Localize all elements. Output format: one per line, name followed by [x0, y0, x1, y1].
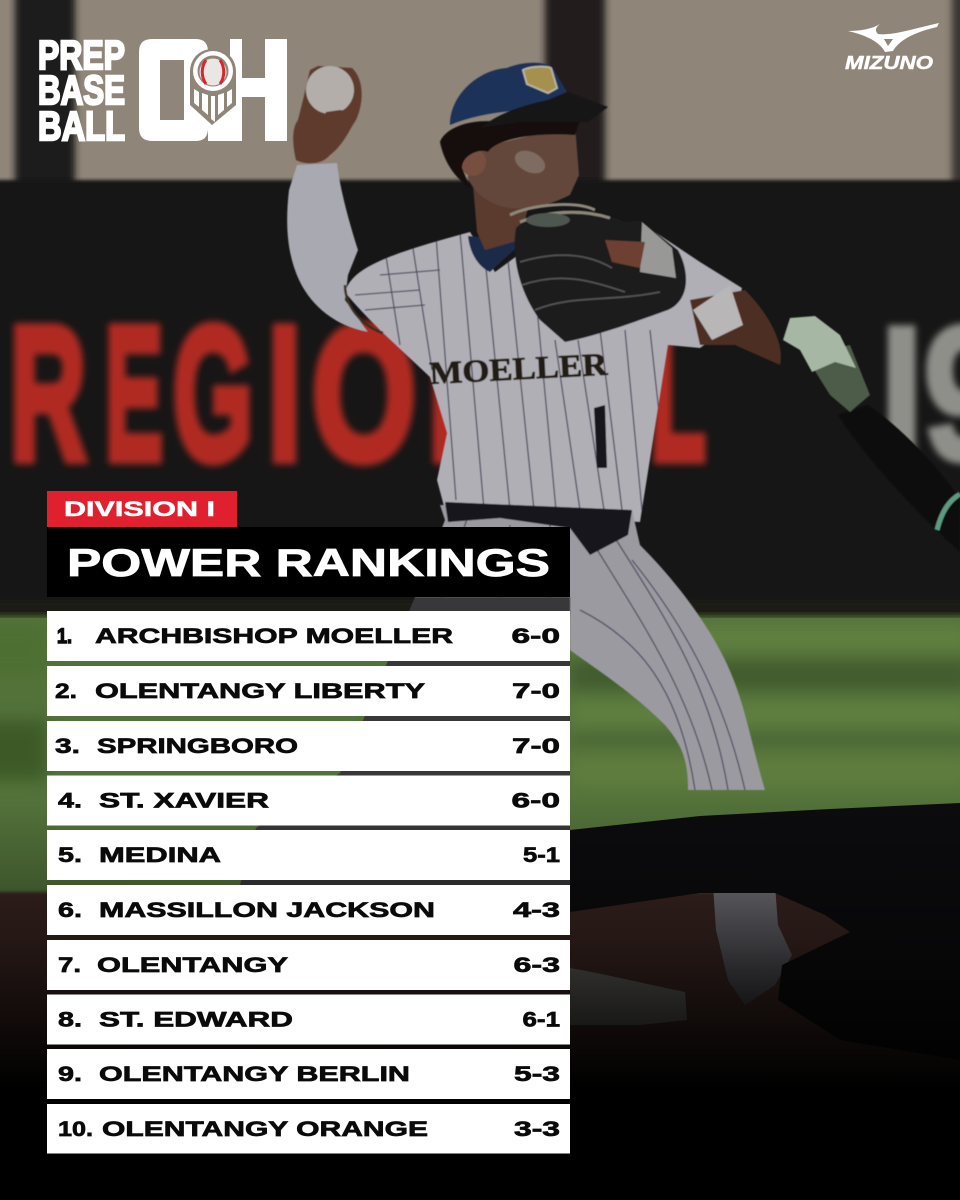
mowing stripes [0, 625, 960, 789]
infield dirt [0, 892, 960, 1200]
jersey wordmark: MOELLER [428, 346, 609, 391]
row 3 [47, 721, 570, 771]
row 7: 6-3 [514, 953, 560, 977]
row 8: ST. EDWARD [99, 1008, 293, 1032]
row 2: 2. [55, 679, 77, 703]
field top shadow [0, 600, 960, 616]
logo: Mizuno [845, 23, 939, 73]
glove wrist strap [640, 222, 676, 278]
logo wordmark: BALL [38, 103, 125, 149]
blurred banner text [10, 288, 960, 500]
cap badge [523, 67, 557, 93]
blurred banner text: E [105, 288, 163, 500]
row 2: OLENTANGY LIBERTY [95, 679, 425, 703]
glove palm sheen [526, 213, 570, 227]
glove [510, 205, 686, 342]
fingers [605, 240, 645, 268]
row 6: MASSILLON JACKSON [99, 898, 435, 922]
hair [440, 120, 580, 188]
row 7: OLENTANGY [97, 953, 288, 977]
title: power rankings [47, 527, 570, 597]
row 3: SPRINGBORO [97, 734, 298, 758]
row 8 [47, 994, 570, 1044]
cap brim [480, 92, 608, 128]
glove laces [510, 205, 610, 222]
row 7: 7. [58, 953, 81, 977]
face [468, 125, 579, 208]
rankings list [47, 611, 570, 1154]
baseball [200, 58, 226, 86]
green batting glove [783, 316, 856, 372]
row 2 [47, 666, 570, 716]
row 4: ST. XAVIER [99, 788, 270, 812]
belt [445, 502, 632, 555]
letter H [208, 39, 287, 141]
row 6: 4-3 [513, 898, 560, 922]
baseball [306, 66, 354, 114]
black arm sleeve [838, 405, 960, 552]
row 5 [47, 830, 570, 880]
row 1: 1. [57, 624, 72, 648]
row 9 [47, 1049, 570, 1099]
shoulder seam [345, 285, 383, 333]
title: power rankings: POWER RANKINGS [67, 542, 550, 585]
row 7 [47, 940, 570, 990]
row 9: 9. [58, 1062, 82, 1086]
row 4: 4. [58, 788, 82, 812]
row 5: 5-1 [523, 843, 560, 867]
blurred banner text: N [428, 288, 518, 500]
gripping fingers [298, 110, 356, 159]
row 1: 6-0 [512, 624, 560, 648]
sliding runner [570, 803, 960, 1060]
row 5: MEDINA [99, 843, 221, 867]
collar [468, 236, 525, 272]
row 2: 7-0 [512, 679, 560, 703]
shield emblem [190, 49, 236, 125]
throwing arm sleeve [287, 163, 368, 332]
cap [450, 63, 608, 128]
far leg behind the list [240, 597, 570, 885]
wrist tape [693, 285, 743, 340]
blurred banner text: I [268, 288, 301, 500]
row 6 [47, 885, 570, 935]
pants pinstripes [440, 510, 745, 790]
glove creases [520, 255, 660, 310]
bottom fade [0, 800, 960, 1090]
blurred banner text: R [10, 288, 86, 500]
blurred banner text: G [173, 288, 253, 500]
logo wordmark: BASE [38, 67, 125, 113]
wristband [937, 494, 960, 530]
row 10 [47, 1104, 570, 1154]
logo wordmark: PREP [38, 32, 125, 78]
logo: Prep Baseball OH [38, 32, 287, 149]
player [287, 63, 781, 790]
cheek highlight [511, 146, 549, 178]
pants [415, 505, 765, 790]
gloved hand [805, 345, 870, 412]
blurred banner text: A [530, 288, 620, 500]
forearm [690, 290, 781, 365]
jersey number [594, 405, 607, 468]
bottom black [0, 1089, 960, 1200]
division badge [47, 491, 237, 527]
division badge: DIVISION I [64, 498, 215, 521]
blurred banner text: O [312, 288, 416, 500]
row 9: OLENTANGY BERLIN [99, 1062, 410, 1086]
ear [460, 148, 486, 176]
row 3: 7-0 [512, 734, 560, 758]
pinstripes [355, 232, 662, 510]
shield stripes [194, 89, 232, 122]
jersey [345, 222, 742, 522]
row 4 [47, 776, 570, 826]
opposing runner [783, 316, 960, 552]
logo wordmark [38, 32, 125, 149]
runbird mark [848, 23, 939, 52]
letter 0 [139, 39, 208, 141]
neck [473, 185, 530, 250]
row 5: 5. [58, 843, 82, 867]
row 10: 10. [58, 1117, 93, 1141]
dark wall pillars [15, 0, 960, 190]
wordmark: MIZUNO [845, 53, 933, 73]
stadium wall [0, 0, 960, 185]
throwing hand [293, 66, 362, 163]
row 9: 5-3 [514, 1062, 560, 1086]
row 10: OLENTANGY ORANGE [102, 1117, 428, 1141]
row 6: 6. [58, 898, 82, 922]
row 8: 8. [58, 1008, 82, 1032]
row 8: 6-1 [522, 1008, 560, 1032]
base [570, 968, 687, 1025]
row 4: 6-0 [512, 788, 560, 812]
row 1: ARCHBISHOP MOELLER [95, 624, 454, 648]
dark outfield banner [0, 180, 960, 610]
row 3: 3. [55, 734, 80, 758]
infielder lower leg and shoe [713, 885, 792, 1005]
row 10: 3-3 [514, 1117, 560, 1141]
blurred banner text: L [650, 288, 706, 500]
green outfield [0, 612, 960, 902]
row 1 [47, 611, 570, 661]
